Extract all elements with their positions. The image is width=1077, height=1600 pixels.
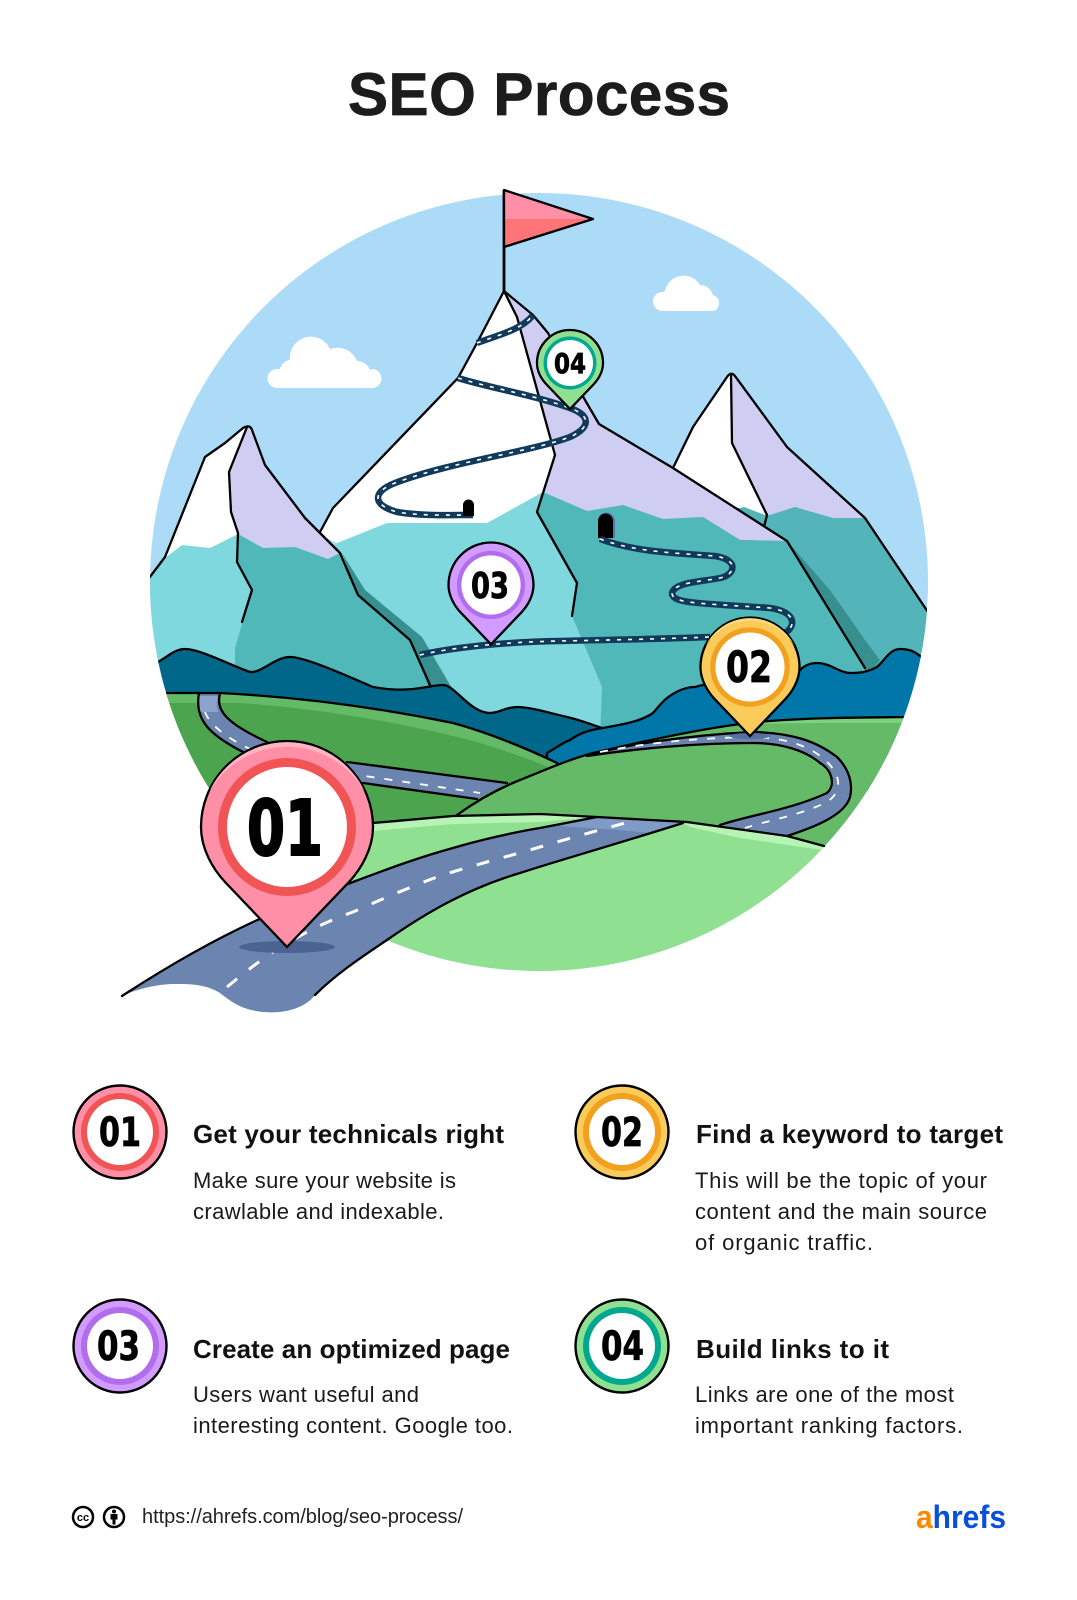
- heading 01: Get your technicals right: [193, 1119, 504, 1149]
- cloud right: [653, 276, 719, 311]
- front green hill: [351, 815, 824, 971]
- pin 04: 04: [554, 347, 586, 380]
- blue hills left: [140, 649, 602, 780]
- icon: creative commons: cc: [77, 1512, 89, 1524]
- logo: ahrefs: ahrefs: [916, 1499, 1006, 1535]
- pin 01: 01: [247, 785, 323, 874]
- scenery clipped to circle: [130, 291, 940, 1000]
- body 02: [695, 1168, 987, 1255]
- body 04: important ranking factors.: [695, 1413, 963, 1438]
- body 01: Make sure your website is: [193, 1168, 456, 1193]
- badge 01: 01: [99, 1110, 141, 1156]
- heading 03: Create an optimized page: [193, 1334, 510, 1364]
- icon: attribution: [104, 1507, 124, 1527]
- title: SEO Process: [348, 61, 730, 128]
- left green hill: [166, 692, 558, 822]
- pin 02: [700, 617, 800, 736]
- heading 04: Build links to it: [696, 1334, 889, 1364]
- pin shadow 02: [729, 733, 771, 739]
- badge 03: [74, 1300, 166, 1392]
- sky circle: [150, 193, 928, 971]
- body 02: content and the main source: [695, 1199, 987, 1224]
- mountain road upper: [378, 315, 586, 516]
- left small mountain: [140, 426, 453, 690]
- right green hill: [457, 717, 940, 900]
- icon: creative commons: [73, 1507, 93, 1527]
- badge 04: [576, 1300, 668, 1392]
- body 04: Links are one of the most: [695, 1382, 954, 1407]
- body 04: [695, 1382, 963, 1438]
- pin 01: [201, 741, 373, 947]
- cloud left: [268, 337, 382, 388]
- pin 04: [537, 330, 603, 409]
- badge 03: 03: [97, 1324, 140, 1370]
- main mountain: [318, 291, 865, 740]
- pin 03: [449, 543, 533, 644]
- badge 04: 04: [601, 1324, 644, 1370]
- illustration: mountain landscape: [122, 190, 940, 1012]
- tunnel and mountain road lower: [420, 512, 792, 655]
- flag on summit: [504, 190, 593, 291]
- body 01: crawlable and indexable.: [193, 1199, 444, 1224]
- step 01: [74, 1086, 504, 1224]
- right mountain: [673, 373, 930, 720]
- blue hills right: [547, 649, 940, 790]
- step 03: [74, 1300, 513, 1438]
- body 01: [193, 1168, 456, 1224]
- pin 02: 02: [726, 643, 772, 693]
- body 03: [193, 1382, 513, 1438]
- heading 02: Find a keyword to target: [696, 1119, 1003, 1149]
- source url: https://ahrefs.com/blog/seo-process/: [142, 1506, 463, 1528]
- pin shadow 01: [239, 941, 335, 953]
- body 02: of organic traffic.: [695, 1230, 873, 1255]
- step 02: [576, 1086, 1003, 1255]
- body 03: interesting content. Google too.: [193, 1413, 513, 1438]
- step 04: [576, 1300, 963, 1438]
- badge 02: [576, 1086, 668, 1178]
- body 03: Users want useful and: [193, 1382, 419, 1407]
- body 02: This will be the topic of your: [695, 1168, 987, 1193]
- badge 02: 02: [601, 1110, 643, 1156]
- badge 01: [74, 1086, 166, 1178]
- pin 03: 03: [471, 566, 509, 607]
- back teal base left: [140, 492, 602, 760]
- main road: [122, 814, 824, 1012]
